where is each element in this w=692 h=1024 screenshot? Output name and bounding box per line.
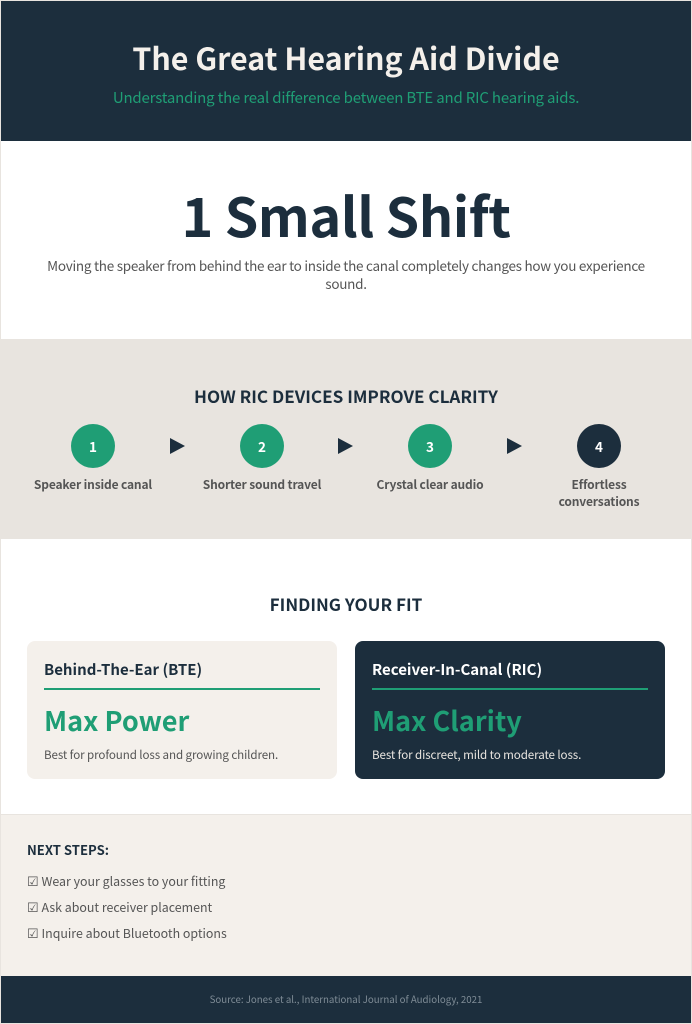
arrow 1 [170, 438, 185, 454]
step 2 circle: 2 [258, 436, 266, 456]
panel: BTE card [27, 641, 337, 779]
checklist item 2: ☑ [27, 897, 39, 916]
RIC headline: Max Clarity [372, 700, 522, 739]
RIC card title: Receiver-In-Canal (RIC) [372, 659, 542, 680]
panel: comparison [1, 539, 691, 814]
step 4 label: Effortless conversations [559, 476, 639, 510]
step 2 circle [240, 424, 284, 468]
BTE card title: Behind-The-Ear (BTE) [44, 659, 202, 680]
checklist item 3: ☑ [27, 923, 39, 942]
step 1 circle: 1 [89, 436, 97, 456]
step 4 circle [577, 424, 621, 468]
BTE description: Best for profound loss and growing children. [44, 747, 278, 763]
big stat heading: 1 Small Shift [181, 174, 511, 253]
arrow 2 [338, 438, 353, 454]
panel: process [0, 339, 692, 539]
step 3 circle [408, 424, 452, 468]
arrow 3 [507, 438, 522, 454]
panel: next steps [1, 814, 691, 976]
step 3 circle: 3 [426, 436, 434, 456]
process heading: HOW RIC DEVICES IMPROVE CLARITY [194, 383, 498, 408]
step 2 label: Shorter sound travel [203, 476, 321, 493]
checklist item 2: Ask about receiver placement [42, 898, 212, 916]
stat description: Moving the speaker from behind the ear to inside the canal completely changes how you experience sound. [47, 255, 645, 293]
checklist item 1: ☑ [27, 871, 39, 890]
footer [1, 976, 691, 1023]
checklist item 3: Inquire about Bluetooth options [42, 924, 227, 942]
step 4 circle: 4 [595, 436, 603, 456]
RIC accent rule [372, 688, 648, 690]
checklist item 1: Wear your glasses to your fitting [42, 872, 225, 890]
title: The Great Hearing Aid Divide [132, 35, 560, 79]
source citation: Source: Jones et al., International Journal of Audiology, 2021 [210, 992, 482, 1006]
step 1 circle [71, 424, 115, 468]
step 3 label: Crystal clear audio [377, 476, 483, 493]
BTE accent rule [44, 688, 320, 690]
panel: RIC card [355, 641, 665, 779]
BTE headline: Max Power [44, 700, 189, 739]
panel: key stat [1, 141, 691, 339]
RIC description: Best for discreet, mild to moderate loss. [372, 747, 581, 763]
comparison heading: FINDING YOUR FIT [270, 590, 422, 616]
step 1 label: Speaker inside canal [34, 476, 152, 493]
subtitle: Understanding the real difference between BTE and RIC hearing aids. [113, 87, 579, 108]
next steps heading: NEXT STEPS: [27, 840, 109, 859]
header panel [1, 1, 691, 141]
